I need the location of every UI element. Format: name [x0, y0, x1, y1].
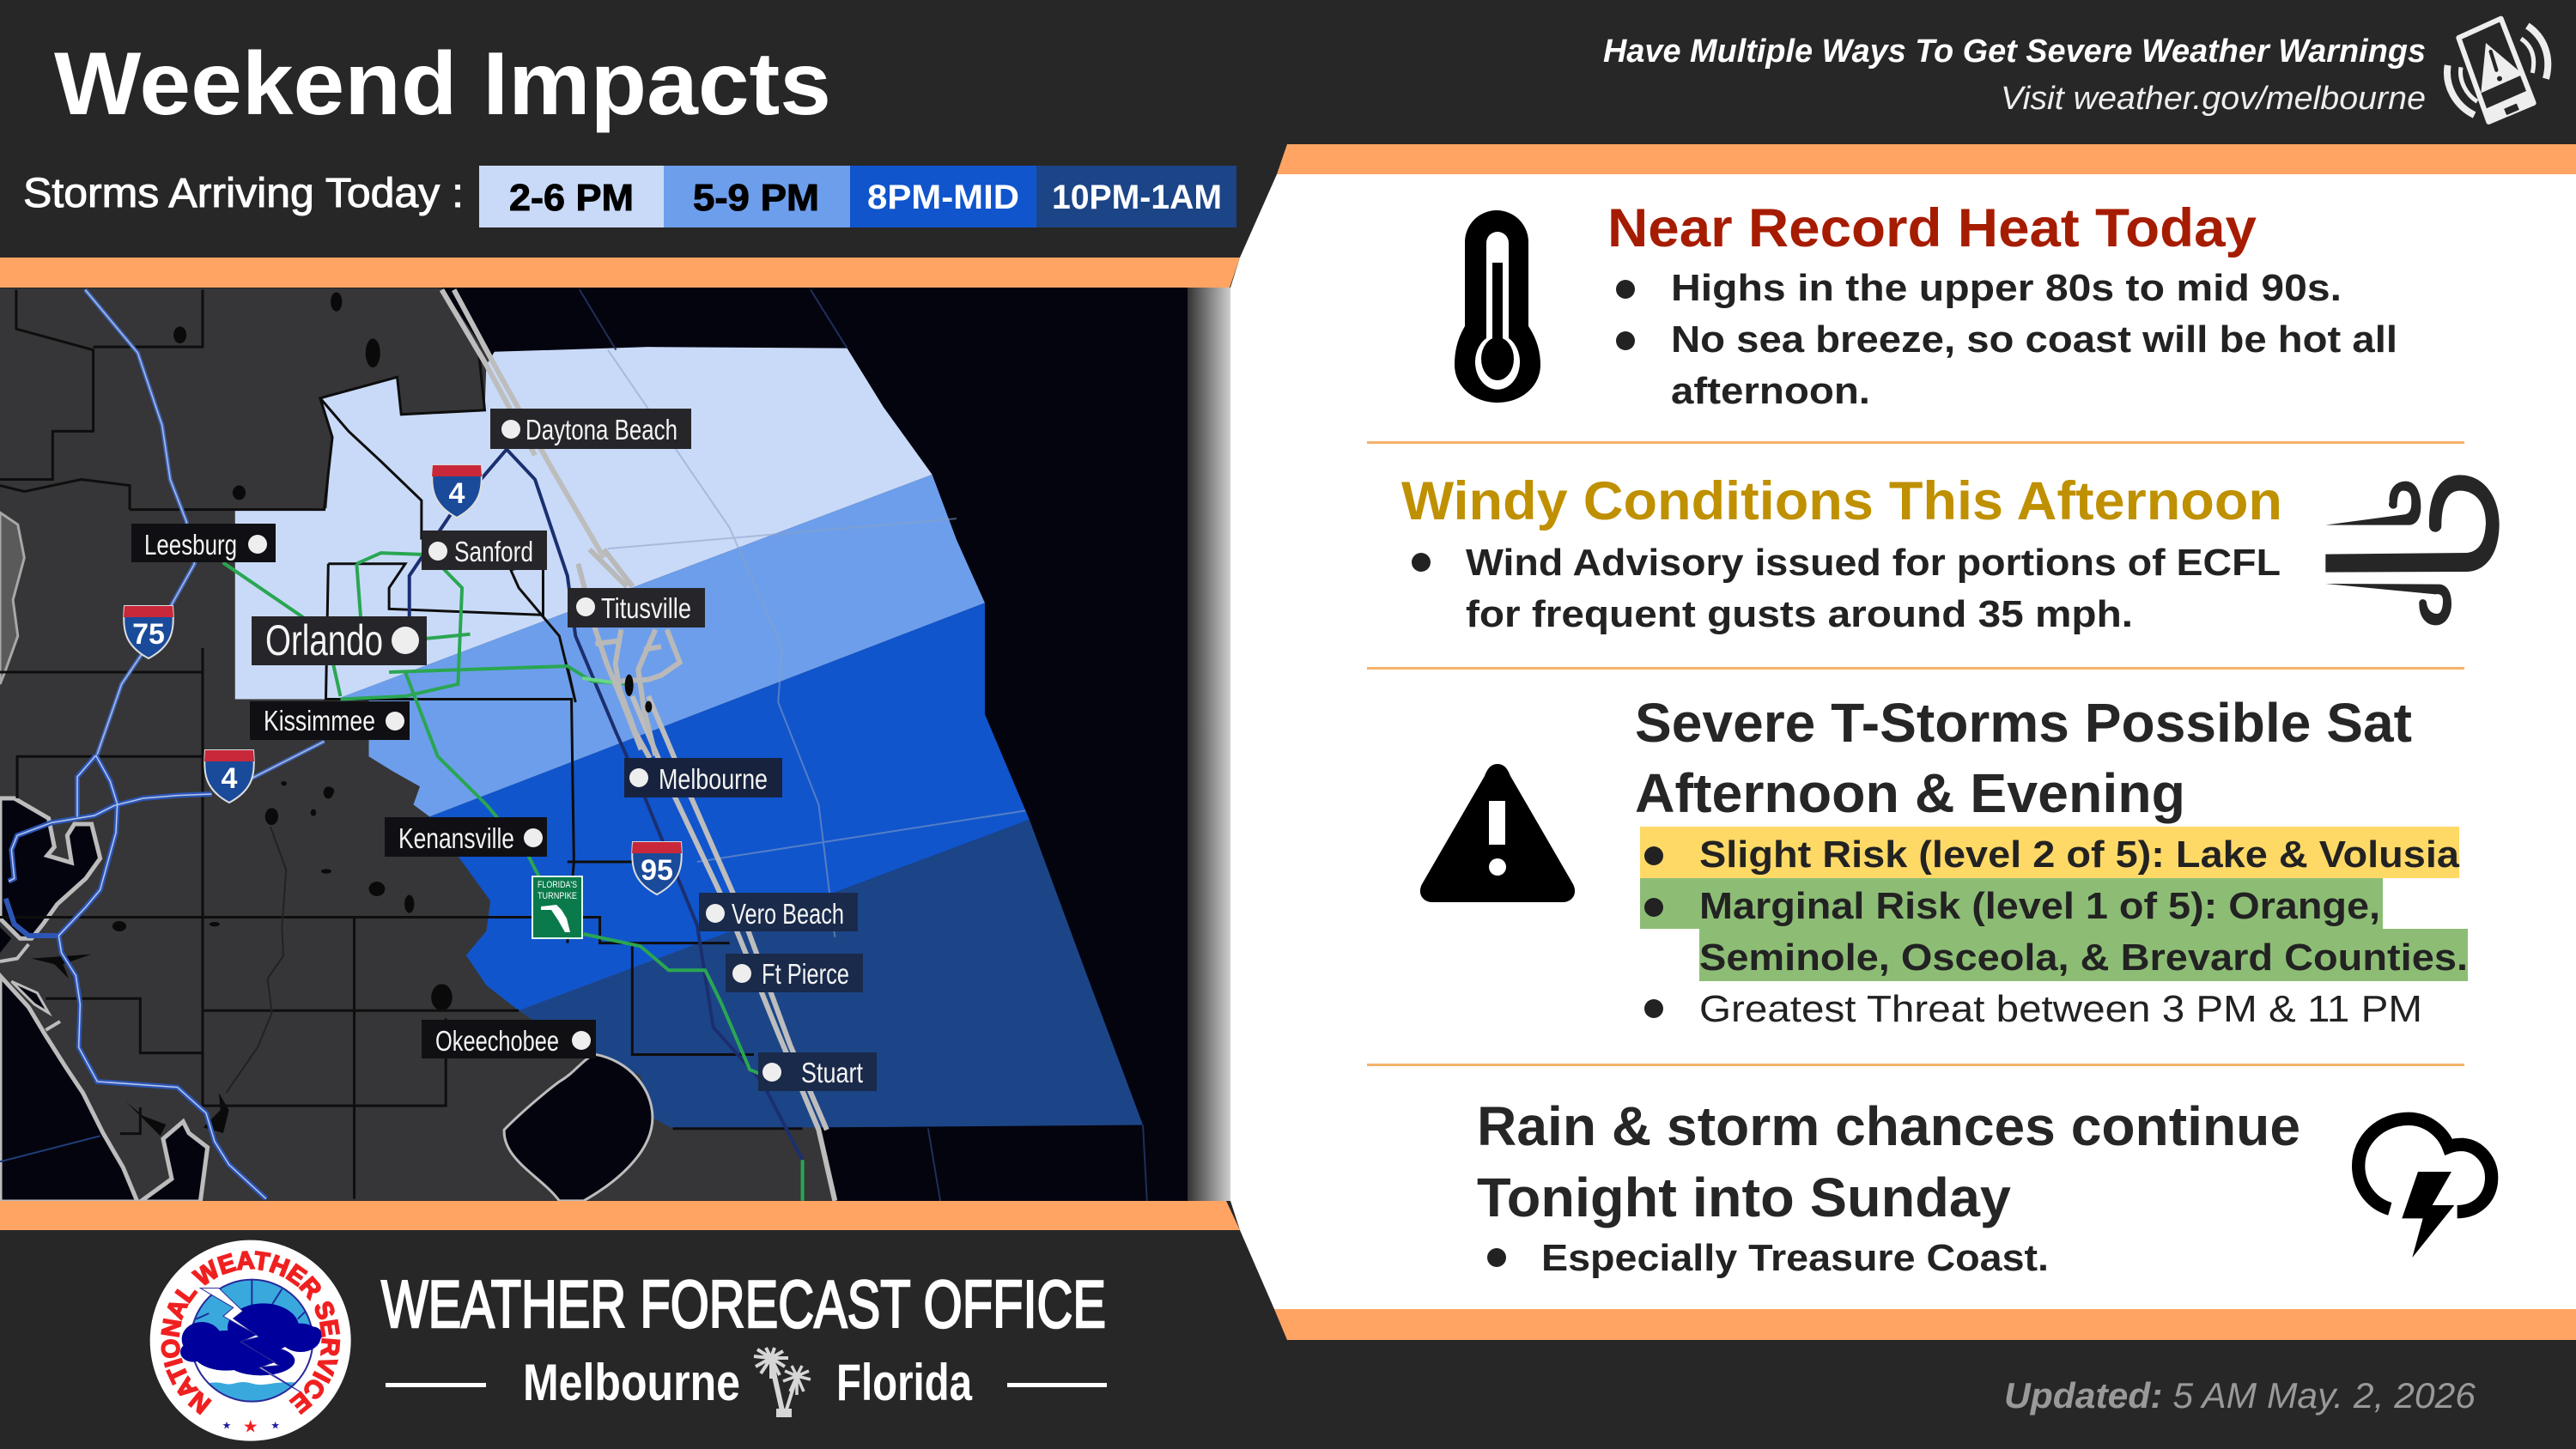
- city label: Ft Pierce: Ft Pierce: [762, 958, 849, 990]
- text: greatest threat: Greatest Threat between 3 PM & 11 PM: [1699, 988, 2422, 1030]
- heading: severe storms: Severe T-Storms Possible Sat: [1635, 692, 2412, 754]
- footer: forecast office wordmark: Melbourne: [523, 1354, 740, 1411]
- highlight: marginal risk: Seminole, Osceola, & Brevard Counties.: [1699, 937, 2468, 979]
- city label: Orlando: Orlando: [265, 616, 383, 664]
- highlight: marginal risk: [1640, 878, 2468, 981]
- footer: forecast office wordmark: WEATHER FORECAST OFFICE: [381, 1266, 1106, 1342]
- icon: interstate 4 shield west: 4: [222, 762, 238, 795]
- city label: Ft Pierce: [726, 954, 863, 992]
- title: Weekend Impacts: [54, 34, 831, 134]
- section: rain chances: [1477, 1095, 2492, 1279]
- highlight: marginal risk: Marginal Risk (level 1 of 5): Orange,: [1699, 885, 2380, 927]
- bullet list: heat: Highs in the upper 80s to mid 90s.: [1671, 267, 2342, 309]
- city label: Kenansville: Kenansville: [398, 822, 514, 854]
- bullet list: wind: Wind Advisory issued for portions of ECFL: [1466, 542, 2281, 584]
- bullet: treasure coast: Especially Treasure Coast.: [1541, 1237, 2049, 1279]
- city label: Melbourne: Melbourne: [659, 763, 768, 795]
- footer: forecast office wordmark: [381, 1266, 1107, 1411]
- heading: windy conditions: Windy Conditions This Afternoon: [1401, 471, 2282, 531]
- city label: Sanford: [422, 530, 547, 570]
- icon: thunderstorm cloud: [2359, 1119, 2492, 1258]
- icon: interstate 4 shield west: [204, 750, 254, 803]
- legend: storms arriving today: 2-6 PM: [509, 177, 634, 219]
- section: severe storms: [1420, 692, 2468, 1030]
- footer: forecast office wordmark: Florida: [836, 1354, 972, 1411]
- heading: near record heat: Near Record Heat Today: [1607, 198, 2257, 258]
- bullet list: heat: afternoon.: [1671, 370, 1870, 412]
- legend: storms arriving today: 8PM-MID: [867, 179, 1019, 216]
- bullet list: heat: [1616, 267, 2397, 412]
- section: near record heat: [1455, 198, 2397, 412]
- orange band: bottom right: [1274, 1309, 2576, 1340]
- icon: Florida's Turnpike sign: [532, 876, 582, 938]
- icon: interstate 4 shield north: 4: [449, 477, 465, 510]
- icon: thermometer: [1455, 210, 1540, 403]
- legend: storms arriving today: [23, 166, 1236, 227]
- heading: rain chances: [1477, 1095, 2300, 1228]
- city label: Vero Beach: [699, 893, 858, 931]
- city label: Vero Beach: Vero Beach: [732, 898, 844, 930]
- city label: Leesburg: [131, 524, 276, 562]
- highlight: slight risk: Slight Risk (level 2 of 5): Lake & Volusia: [1699, 834, 2460, 876]
- logo: National Weather Service: ★: [243, 1418, 258, 1437]
- city label: Titusville: [568, 588, 705, 627]
- icon: phone alert: [2447, 19, 2548, 123]
- icon: Florida's Turnpike sign: FLORIDA'S: [538, 880, 577, 890]
- icon: warning triangle: [1420, 764, 1575, 902]
- heading: severe storms: [1635, 692, 2412, 824]
- heading: severe storms: Afternoon & Evening: [1635, 762, 2185, 824]
- section: windy conditions: [1401, 471, 2500, 635]
- bullet list: heat: No sea breeze, so coast will be hot all: [1671, 318, 2397, 361]
- bullet list: wind: [1412, 542, 2281, 635]
- icon: interstate 4 shield north: [432, 465, 482, 518]
- city label: Sanford: Sanford: [454, 536, 533, 567]
- city label: Okeechobee: Okeechobee: [435, 1025, 559, 1057]
- city label: Daytona Beach: [490, 409, 691, 449]
- city label: Stuart: Stuart: [801, 1057, 863, 1088]
- divider: [1367, 441, 2464, 444]
- legend: storms arriving today: Storms Arriving Today :: [23, 171, 464, 216]
- city label: Leesburg: Leesburg: [144, 529, 237, 561]
- icon: interstate 95 shield: [632, 842, 682, 894]
- orange band: bottom left: [0, 1201, 1240, 1230]
- icon: palm trees: [754, 1348, 811, 1415]
- divider: [1367, 667, 2464, 670]
- icon: wind: [2325, 475, 2500, 625]
- panel: map: [0, 288, 1236, 1202]
- city label: Titusville: Titusville: [601, 592, 691, 624]
- logo: National Weather Service: ★: [270, 1420, 280, 1432]
- panel: white impacts panel: [1230, 174, 2576, 1309]
- divider: [1367, 1064, 2464, 1066]
- legend: storms arriving today: 5-9 PM: [693, 177, 819, 219]
- updated timestamp: Updated: 5 AM May. 2, 2026: [2004, 1375, 2476, 1416]
- icon: interstate 75 shield: [124, 606, 173, 658]
- heading: rain chances: Tonight into Sunday: [1477, 1167, 2011, 1228]
- icon: interstate 95 shield: 95: [641, 854, 673, 887]
- city label: Daytona Beach: Daytona Beach: [526, 414, 677, 446]
- orange band: top left: [0, 258, 1240, 288]
- orange band: top right: [1277, 144, 2576, 174]
- city label: Stuart: [758, 1052, 877, 1091]
- city label: Melbourne: [624, 758, 782, 797]
- bullet list: wind: for frequent gusts around 35 mph.: [1466, 593, 2133, 635]
- warning message text: [1603, 33, 2426, 117]
- city label: Kissimmee: Kissimmee: [264, 705, 375, 737]
- warning message text: Visit weather.gov/melbourne: [2001, 81, 2426, 117]
- warning message text: Have Multiple Ways To Get Severe Weather Warnings: [1603, 33, 2426, 70]
- icon: interstate 75 shield: 75: [132, 618, 165, 651]
- icon: Florida's Turnpike sign: TURNPIKE: [538, 891, 577, 901]
- legend: storms arriving today: 10PM-1AM: [1052, 179, 1222, 216]
- heading: rain chances: Rain & storm chances continue: [1477, 1095, 2300, 1157]
- logo: National Weather Service: ★: [222, 1420, 231, 1432]
- logo: National Weather Service: NATIONAL WEATHER SERVICE: [161, 1250, 340, 1415]
